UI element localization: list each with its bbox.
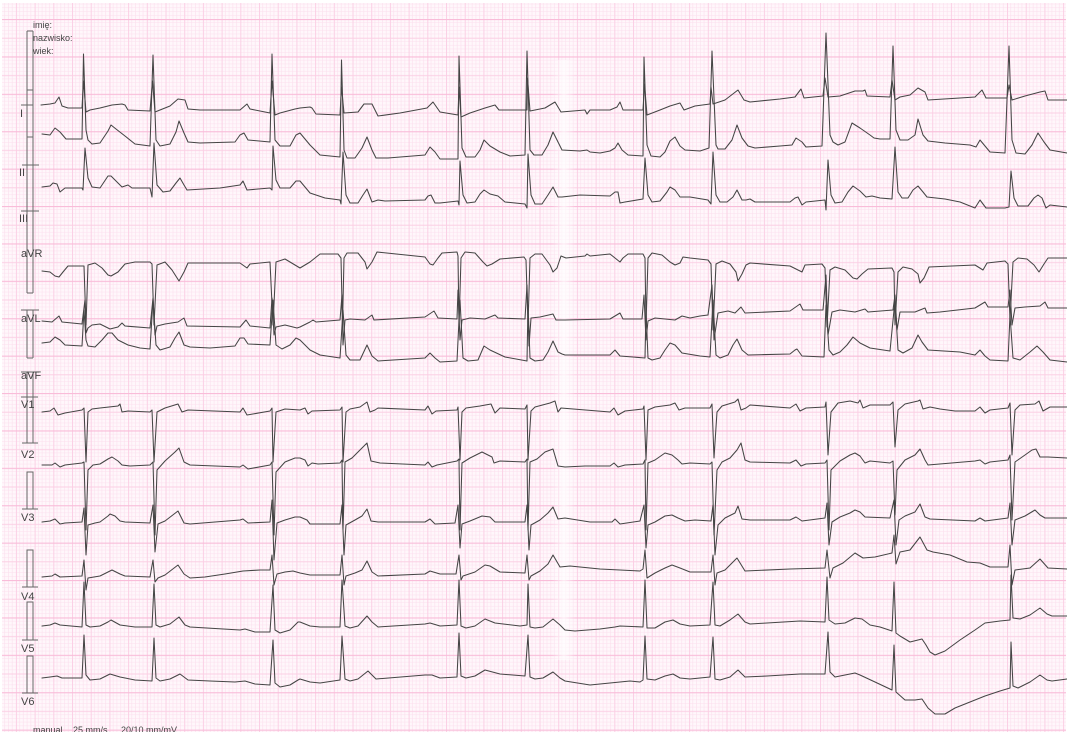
lead labels: V6	[21, 696, 34, 708]
trace: lead V6	[42, 632, 1067, 714]
patient data text	[32, 20, 73, 56]
lead labels: II	[19, 167, 25, 179]
trace: lead V1	[42, 399, 1067, 462]
calibration pulses	[21, 31, 39, 693]
trace: lead V2	[42, 443, 1067, 535]
trace: lead V5	[42, 575, 1067, 655]
lead labels: III	[19, 213, 28, 225]
patient data text: wiek:	[32, 46, 54, 56]
lead labels: V5	[21, 643, 34, 655]
trace: lead aVR	[42, 252, 1067, 330]
lead labels: V2	[21, 449, 34, 461]
patient data text: nazwisko:	[33, 33, 73, 43]
trace: lead III	[42, 143, 1067, 210]
lead labels: aVF	[21, 370, 41, 382]
recording settings footer	[33, 725, 177, 732]
trace: lead aVL	[42, 275, 1067, 346]
lead labels: I	[20, 108, 23, 120]
lead labels: V1	[21, 399, 34, 411]
patient data text: imię:	[33, 20, 52, 30]
lead labels	[19, 108, 42, 708]
trace: lead aVF	[42, 300, 1067, 362]
lead labels: aVR	[21, 248, 42, 260]
trace: lead V4	[42, 535, 1067, 590]
trace: lead I	[41, 78, 1067, 117]
lead labels: V3	[21, 512, 34, 524]
trace: lead II	[42, 33, 1067, 159]
lead labels: V4	[21, 591, 34, 603]
lead labels: aVL	[21, 313, 41, 325]
trace: lead V3	[42, 500, 1067, 560]
